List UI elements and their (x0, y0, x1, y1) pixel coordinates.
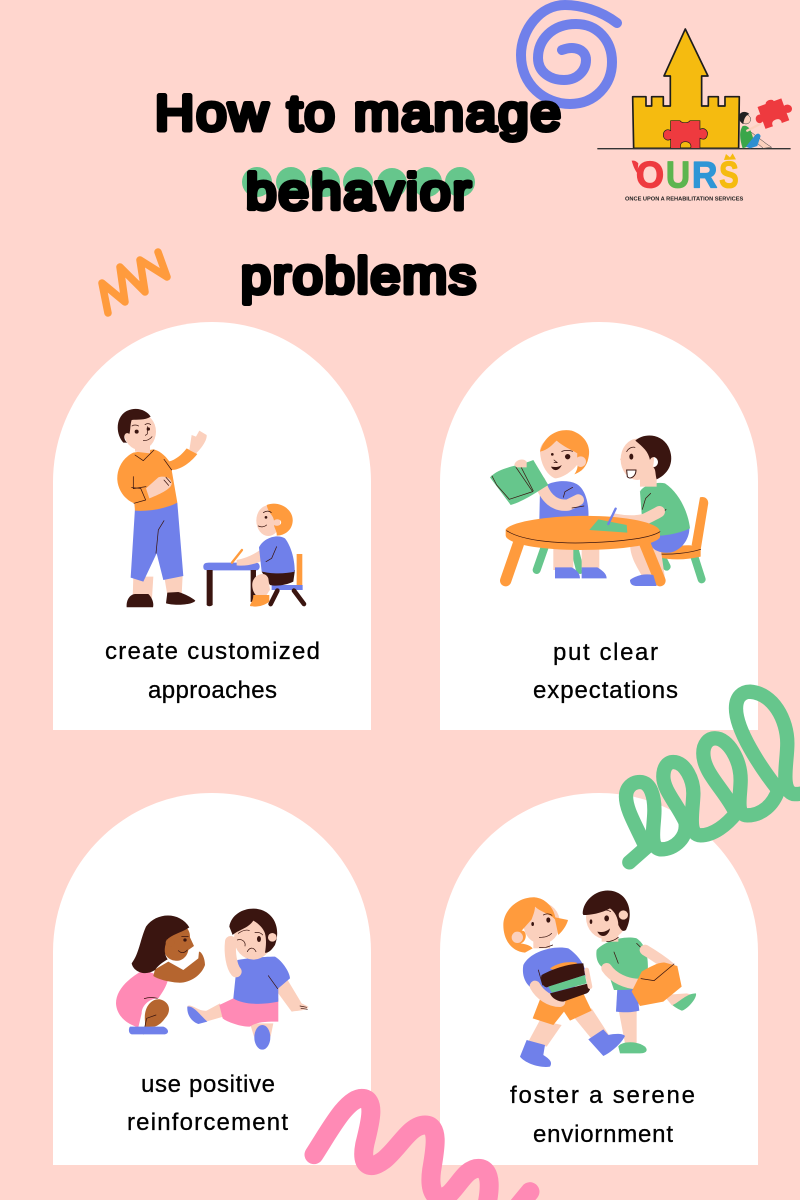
decoration: green spring squiggle (626, 692, 800, 862)
illustration: girl comforting crying child (116, 909, 308, 1050)
illustration: man and child at desk (117, 409, 304, 607)
caption: put clear (553, 639, 658, 666)
logo wordmark (632, 153, 739, 195)
logo wordmark: S (719, 153, 739, 195)
logo tagline: ONCE UPON A REHABILITATION SERVICES (625, 197, 744, 203)
decoration: purple spiral (521, 5, 617, 104)
reading figure (739, 112, 772, 148)
logo wordmark: O (636, 153, 664, 195)
card background (440, 322, 758, 730)
caption (533, 639, 678, 704)
caption: approaches (148, 677, 277, 704)
caption: expectations (533, 677, 678, 704)
title line 2: behavior (246, 164, 473, 220)
panel: use positive reinforcement (53, 793, 371, 1165)
card background (53, 793, 371, 1165)
castle (633, 29, 739, 148)
logo wordmark: R (692, 153, 717, 195)
caption (127, 1071, 288, 1136)
title line 3: problems (241, 248, 478, 304)
logo: OURS castle (597, 29, 796, 203)
puzzle piece in castle (663, 121, 707, 148)
caption: foster a serene (510, 1082, 695, 1109)
caption (105, 638, 320, 704)
caption: use positive (141, 1071, 275, 1098)
card background (440, 793, 758, 1165)
ground line (597, 147, 791, 151)
decoration: pink squiggle (314, 1098, 530, 1200)
title line 1: How to manage (155, 85, 563, 141)
caption: reinforcement (127, 1109, 288, 1136)
highlight: green dots behind behavior (242, 167, 475, 198)
caption: enviornment (533, 1121, 673, 1148)
title (155, 85, 563, 304)
panel: put clear expectations (440, 322, 758, 730)
panel: create customized approaches (53, 322, 371, 730)
flying puzzle piece (751, 94, 796, 131)
panel: foster a serene enviornment (440, 793, 758, 1165)
illustration: children carrying boxes (503, 890, 696, 1067)
illustration: two children at table (490, 430, 708, 586)
caption (510, 1082, 695, 1148)
decoration: orange zigzag (102, 252, 167, 313)
logo wordmark: U (666, 153, 690, 195)
card background (53, 322, 371, 730)
caption: create customized (105, 638, 320, 665)
